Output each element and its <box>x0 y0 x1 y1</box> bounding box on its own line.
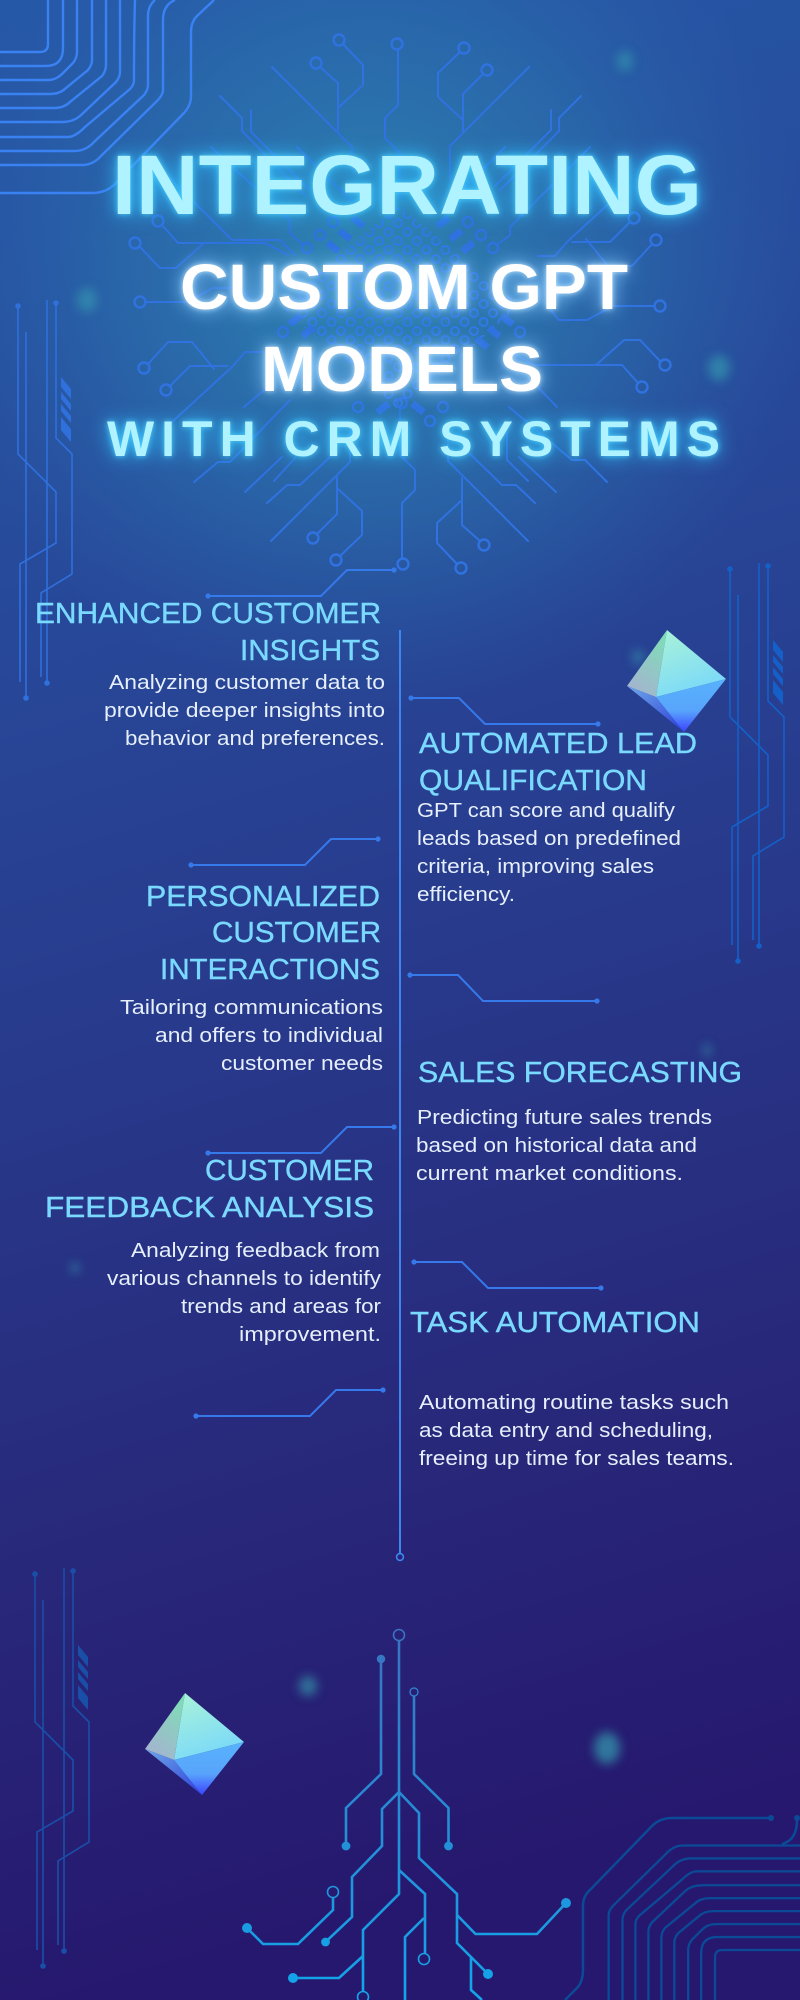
panel: automated lead qualification: leads based on predefined <box>417 827 681 850</box>
glowing teal particles <box>71 51 730 1764</box>
panel: task automation: freeing up time for sales teams. <box>419 1447 734 1470</box>
panel: personalized customer interactions: Tailoring communications <box>120 996 383 1019</box>
panel: sales forecasting: SALES FORECASTING <box>418 1057 742 1089</box>
panel: automated lead qualification: AUTOMATED LEAD <box>419 728 697 760</box>
panel: enhanced customer insights <box>35 598 385 750</box>
panel: automated lead qualification <box>417 728 697 906</box>
icon: gem top right <box>627 630 726 732</box>
connector 6 <box>411 1259 604 1291</box>
panel: personalized customer interactions: and offers to individual <box>155 1024 383 1047</box>
panel: sales forecasting: based on historical data and <box>416 1134 697 1157</box>
panel: personalized customer interactions: PERSONALIZED <box>146 881 380 913</box>
panel: customer feedback analysis: various channels to identify <box>107 1267 382 1290</box>
panel: automated lead qualification: GPT can score and qualify <box>417 799 676 822</box>
circuit: right side <box>727 563 784 964</box>
panel: customer feedback analysis: CUSTOMER <box>205 1155 374 1187</box>
circuit traces: bottom-right corner <box>565 1815 800 2000</box>
panel: personalized customer interactions: CUSTOMER <box>212 917 381 949</box>
circuit traces: top-left corner <box>0 0 214 193</box>
panel: customer feedback analysis: improvement. <box>239 1323 381 1346</box>
panel: task automation: as data entry and scheduling, <box>419 1419 713 1442</box>
circuit: left side <box>15 300 72 701</box>
title: INTEGRATING <box>112 138 702 232</box>
circuit: bottom centre <box>242 1630 571 2000</box>
panel: personalized customer interactions <box>120 881 383 1075</box>
panel: task automation <box>410 1307 734 1470</box>
panel: customer feedback analysis: trends and areas for <box>181 1295 381 1318</box>
panel: automated lead qualification: criteria, improving sales <box>417 855 654 878</box>
connector 7 <box>193 1387 386 1419</box>
title <box>107 138 720 467</box>
panel: sales forecasting <box>416 1057 742 1185</box>
panel: task automation: Automating routine tasks such <box>419 1391 729 1414</box>
title: WITH CRM SYSTEMS <box>107 411 720 467</box>
connector 5 <box>205 1124 397 1156</box>
panel: personalized customer interactions: customer needs <box>221 1052 383 1075</box>
panel: automated lead qualification: QUALIFICATION <box>419 765 647 797</box>
panel: customer feedback analysis: Analyzing feedback from <box>131 1239 380 1262</box>
panel: enhanced customer insights: INSIGHTS <box>240 635 380 667</box>
central circuit: upper traces <box>130 34 662 308</box>
panel: sales forecasting: current market conditions. <box>416 1162 683 1185</box>
connector 2 <box>408 695 601 727</box>
panel: enhanced customer insights: Analyzing customer data to <box>109 671 385 694</box>
panel: automated lead qualification: efficiency. <box>417 883 515 906</box>
connector 4 <box>407 972 600 1004</box>
central circuit: chip <box>278 205 525 426</box>
panel: enhanced customer insights: provide deeper insights into <box>104 699 385 722</box>
panel: enhanced customer insights: behavior and preferences. <box>125 727 385 750</box>
panel: customer feedback analysis <box>45 1155 382 1346</box>
central circuit: lower traces <box>138 300 670 574</box>
connector 1 <box>205 567 397 599</box>
title: MODELS <box>261 333 543 405</box>
circuit: bottom-left side <box>32 1568 89 1969</box>
panel: task automation: TASK AUTOMATION <box>410 1307 700 1339</box>
panel: sales forecasting: Predicting future sales trends <box>417 1106 712 1129</box>
title: CUSTOM GPT <box>180 251 628 323</box>
panel: customer feedback analysis: FEEDBACK ANALYSIS <box>45 1192 374 1224</box>
panel: enhanced customer insights: ENHANCED CUSTOMER <box>35 598 381 630</box>
timeline <box>397 630 403 1560</box>
connector 3 <box>188 836 381 868</box>
icon: gem bottom left <box>145 1693 244 1795</box>
panel: personalized customer interactions: INTERACTIONS <box>160 954 380 986</box>
